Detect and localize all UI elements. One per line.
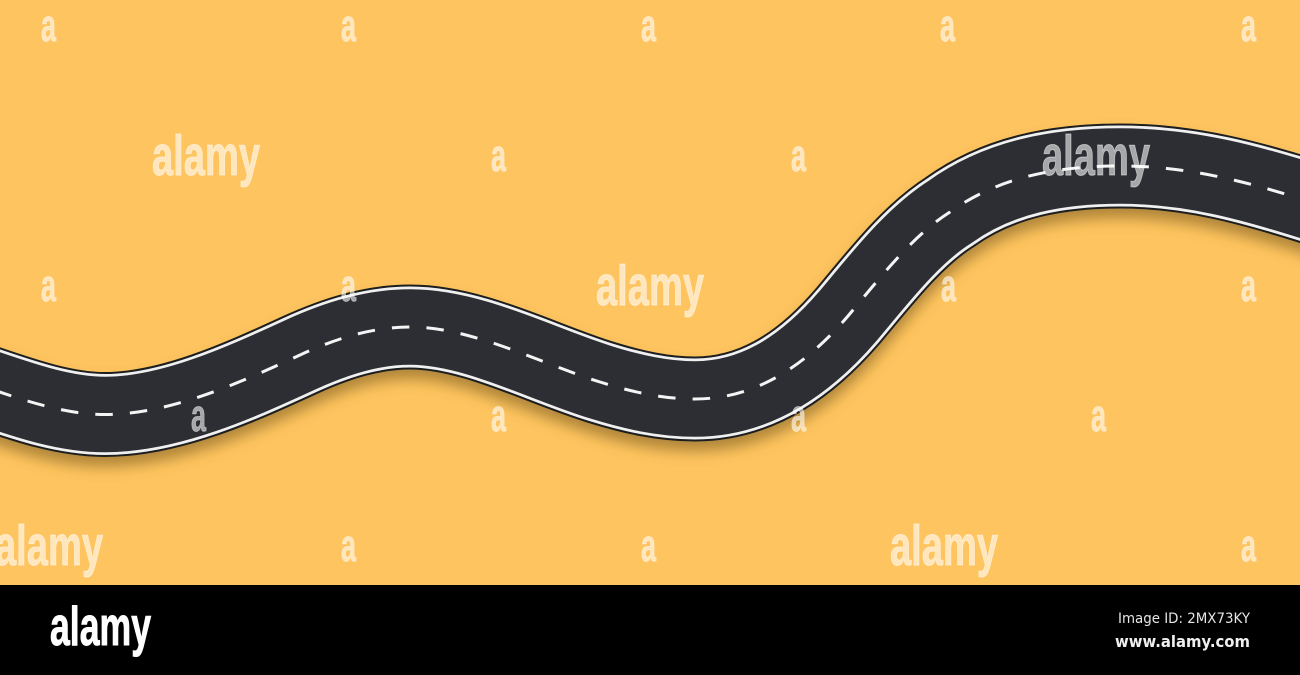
- dashed centre line: [0, 166, 1300, 414]
- small watermarks: a: [791, 390, 807, 441]
- large watermarks: alamy: [152, 124, 260, 188]
- footer logo: alamy: [50, 595, 151, 657]
- footer bar: [0, 585, 1300, 675]
- small watermarks: [41, 0, 1257, 571]
- road outer edge: [0, 166, 1300, 414]
- large watermarks: alamy: [1042, 124, 1150, 188]
- small watermarks: a: [1241, 520, 1257, 571]
- small watermarks: a: [791, 130, 807, 181]
- small watermarks: a: [940, 0, 956, 51]
- large watermarks: [0, 124, 1150, 578]
- white edge lines: [0, 166, 1300, 414]
- asphalt surface: [0, 166, 1300, 414]
- image id: Image ID: 2MX73KY: [1118, 611, 1250, 627]
- small watermarks: a: [41, 260, 57, 311]
- small watermarks: a: [41, 0, 57, 51]
- small watermarks: a: [641, 0, 657, 51]
- small watermarks: a: [941, 260, 957, 311]
- large watermarks: alamy: [890, 514, 998, 578]
- small watermarks: a: [1091, 390, 1107, 441]
- small watermarks: a: [341, 260, 357, 311]
- road shadow: [0, 176, 1300, 424]
- small watermarks: a: [491, 390, 507, 441]
- winding road: [0, 166, 1300, 424]
- website: www.alamy.com: [1115, 632, 1250, 651]
- small watermarks: a: [191, 390, 207, 441]
- small watermarks: a: [641, 520, 657, 571]
- large watermarks: alamy: [596, 254, 704, 318]
- small watermarks: a: [1241, 0, 1257, 51]
- small watermarks: a: [491, 130, 507, 181]
- small watermarks: a: [341, 520, 357, 571]
- small watermarks: a: [341, 0, 357, 51]
- small watermarks: a: [1241, 260, 1257, 311]
